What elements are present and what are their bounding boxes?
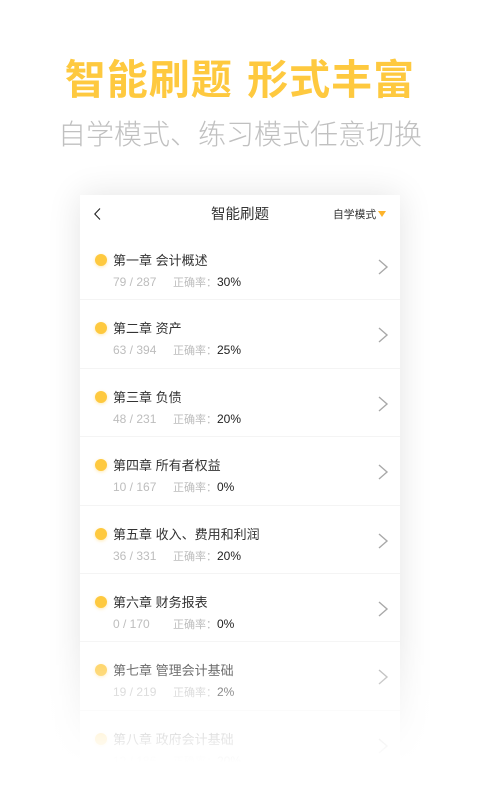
chapter row 3: 48 / 231 xyxy=(113,412,156,426)
subtitle: 自学模式、练习模式任意切换 xyxy=(58,119,422,150)
panel: phone screen card xyxy=(80,195,400,775)
mode selector: 自学模式 xyxy=(333,209,376,221)
title: 智能刷题 形式丰富 xyxy=(65,57,415,103)
chapter row 2: 63 / 394 xyxy=(113,343,156,357)
chapter row 1 xyxy=(80,232,400,300)
chapter row 5: 36 / 331 xyxy=(113,549,156,563)
chapter row 3: 正确率：20% xyxy=(173,412,241,426)
chapter row 6: 0 / 170 xyxy=(113,617,150,631)
chapter row 8: 第八章 政府会计基础 xyxy=(113,732,234,747)
chapter row 3: 第三章 负债 xyxy=(113,390,182,405)
chapter row 4: 正确率：0% xyxy=(173,480,234,494)
icon: back arrow xyxy=(94,208,100,220)
chapter row 4: 第四章 所有者权益 xyxy=(113,458,221,473)
chapter row 2: 正确率：25% xyxy=(173,343,241,357)
chapter row 1: 正确率：30% xyxy=(173,275,241,289)
chapter row 7: 正确率：2% xyxy=(173,685,234,699)
chapter row 5 xyxy=(80,506,400,574)
chapter row 8 xyxy=(95,732,386,768)
chapter row 6 xyxy=(80,574,400,642)
chapter row 7 xyxy=(80,642,400,711)
chapter row 5: 第五章 收入、费用和利润 xyxy=(113,527,260,542)
chapter row 2 xyxy=(80,300,400,369)
chapter row 7: 第七章 管理会计基础 xyxy=(113,663,234,678)
chapter row 6: 第六章 财务报表 xyxy=(113,595,208,610)
chapter row 8: 正确率：20% xyxy=(173,754,241,768)
chapter row 3 xyxy=(80,369,400,437)
chapter row 1: 79 / 287 xyxy=(113,275,156,289)
chapter row 5: 正确率：20% xyxy=(173,549,241,563)
chapter row 4: 10 / 167 xyxy=(113,480,156,494)
bottom white fade overlay xyxy=(0,630,480,800)
chapter row 4 xyxy=(80,437,400,506)
chapter row 8: 12 / 186 xyxy=(113,754,156,768)
chapter row 7: 19 / 219 xyxy=(113,685,156,699)
chapter row 1: 第一章 会计概述 xyxy=(113,253,208,268)
chapter row 6: 正确率：0% xyxy=(173,617,234,631)
chapter row 2: 第二章 资产 xyxy=(113,321,182,336)
screen heading: 智能刷题 xyxy=(211,207,269,223)
